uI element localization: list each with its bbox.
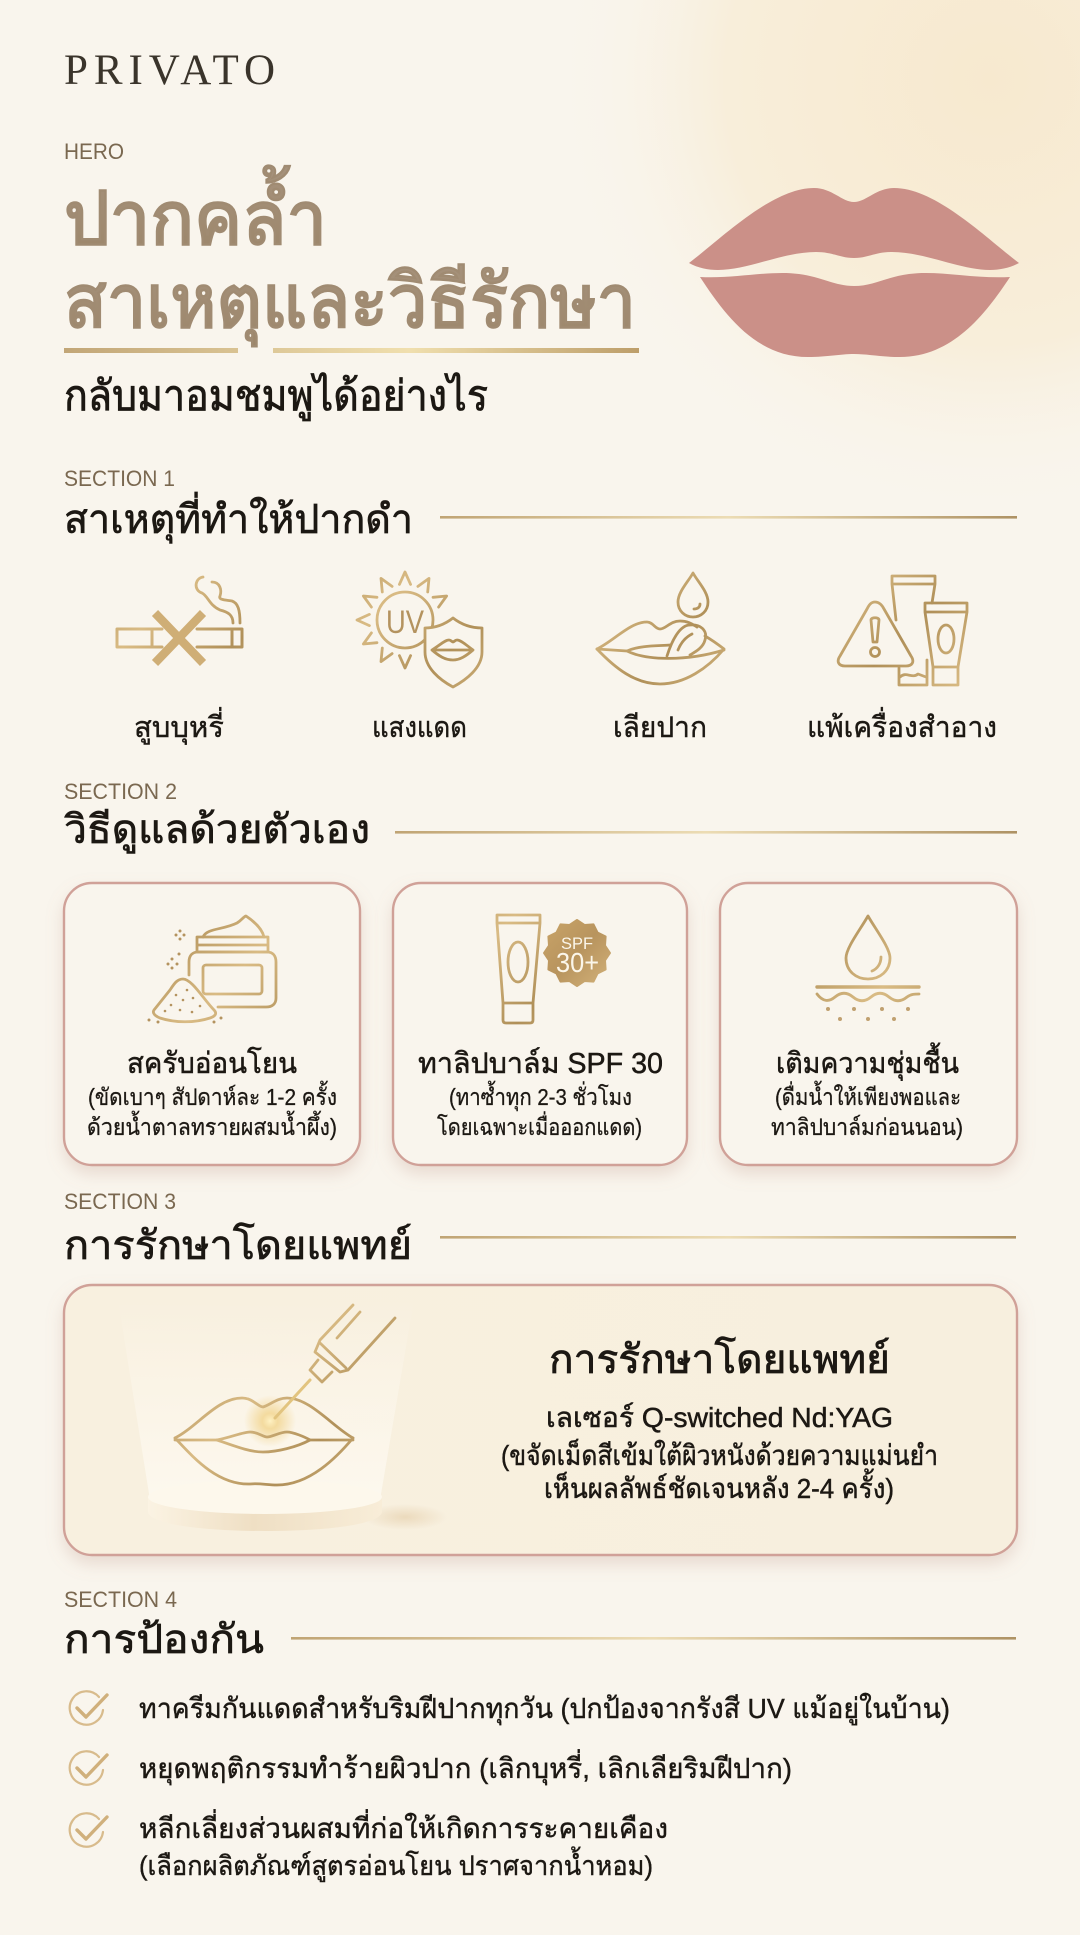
illustration: laser on lips over pedestal [118, 1300, 447, 1531]
section 1: causes [64, 466, 1017, 745]
card title: ทาลิปบาล์ม SPF 30 [418, 1047, 663, 1080]
card: gentle scrub [64, 883, 360, 1165]
panel text: (ขจัดเม็ดสีเข้มใต้ผิวหนังด้วยความแม่นยำ [501, 1438, 938, 1471]
section 2 label: SECTION 2 [64, 779, 177, 804]
cause labels: แพ้เครื่องสำอาง [807, 707, 997, 744]
card title: เติมความชุ่มชื้น [776, 1042, 959, 1081]
card text: ด้วยน้ำตาลทรายผสมน้ำผึ้ง) [87, 1111, 337, 1140]
icon: UV sun with lip shield: UV [386, 604, 425, 640]
icon: SPF tube and badge [497, 915, 610, 1023]
hero title line 2: สาเหตุและวิธีรักษา [64, 260, 636, 347]
hero illustration: pink lips [689, 188, 1019, 357]
section 4 heading: การป้องกัน [64, 1618, 264, 1662]
card text [437, 1081, 642, 1140]
card text: (ดื่มน้ำให้เพียงพอและ [775, 1081, 961, 1110]
cause labels: แสงแดด [372, 712, 467, 744]
icon: check [70, 1691, 107, 1725]
icon: UV sun with lip shield [357, 572, 482, 687]
section 1 heading: สาเหตุที่ทำให้ปากดำ [64, 492, 413, 544]
hero eyebrow: HERO [64, 139, 124, 164]
hero title underline [64, 348, 639, 353]
cause labels: เลียปาก [613, 712, 707, 744]
card text: ทาลิปบาล์มก่อนนอน) [771, 1114, 963, 1140]
icon: scrub jar and powder [148, 916, 276, 1024]
card text: โดยเฉพาะเมื่อออกแดด) [437, 1111, 642, 1140]
section 2 heading: วิธีดูแลด้วยตัวเอง [64, 808, 370, 853]
icon: water drop on skin [817, 916, 919, 1021]
cause labels [134, 707, 997, 745]
cause labels: สูบบุหรี่ [134, 707, 224, 745]
section 4: prevention [64, 1587, 1016, 1882]
card title: สครับอ่อนโยน [127, 1046, 297, 1080]
section 3 label: SECTION 3 [64, 1189, 176, 1214]
icon: check [70, 1813, 107, 1847]
hero title line 1: ปากคล้ำ [64, 165, 327, 260]
icon: licking lips with drop [597, 573, 724, 684]
panel title: การรักษาโดยแพทย์ [549, 1337, 890, 1382]
panel text: เลเซอร์ Q-switched Nd:YAG [546, 1402, 893, 1433]
card text [771, 1081, 963, 1140]
section 2: self care [64, 779, 1017, 1165]
card text: (ทาซ้ำทุก 2-3 ชั่วโมง [449, 1081, 632, 1111]
card text: (ขัดเบาๆ สัปดาห์ละ 1-2 ครั้ง [88, 1081, 337, 1110]
section 3 heading: การรักษาโดยแพทย์ [64, 1223, 412, 1268]
panel: laser treatment [64, 1285, 1017, 1555]
checklist item 3: หลีกเลี่ยงส่วนผสมที่ก่อให้เกิดการระคายเคือง [139, 1809, 668, 1844]
hero subtitle: กลับมาอมชมพูได้อย่างไร [64, 372, 488, 421]
icon: no smoking [117, 577, 242, 663]
section 4 label: SECTION 4 [64, 1587, 177, 1612]
icon: SPF tube and badge: 30+ [556, 947, 599, 978]
hero block [64, 139, 639, 421]
icon: cosmetic allergy warning [838, 576, 967, 685]
section 3: medical treatment [64, 1189, 1017, 1555]
checklist item 3 [70, 1809, 668, 1882]
brand logo: PRIVATO: PRIVATO [64, 47, 275, 94]
icon: SPF tube and badge: SPF [561, 934, 593, 953]
card: moisturise [720, 883, 1017, 1165]
panel text [501, 1402, 938, 1504]
icon: check [70, 1751, 107, 1785]
section 1 label: SECTION 1 [64, 466, 175, 491]
panel text: เห็นผลลัพธ์ชัดเจนหลัง 2-4 ครั้ง) [544, 1468, 894, 1504]
checklist item 1: ทาครีมกันแดดสำหรับริมฝีปากทุกวัน (ปกป้องจากรังสี UV แม้อยู่ในบ้าน) [139, 1692, 950, 1726]
card: SPF lip balm [393, 883, 687, 1165]
checklist item 2: หยุดพฤติกรรมทำร้ายผิวปาก (เลิกบุหรี่, เลิกเลียริมฝีปาก) [139, 1749, 792, 1786]
checklist item 3: (เลือกผลิตภัณฑ์สูตรอ่อนโยน ปราศจากน้ำหอม) [139, 1846, 653, 1882]
card text [87, 1081, 337, 1140]
